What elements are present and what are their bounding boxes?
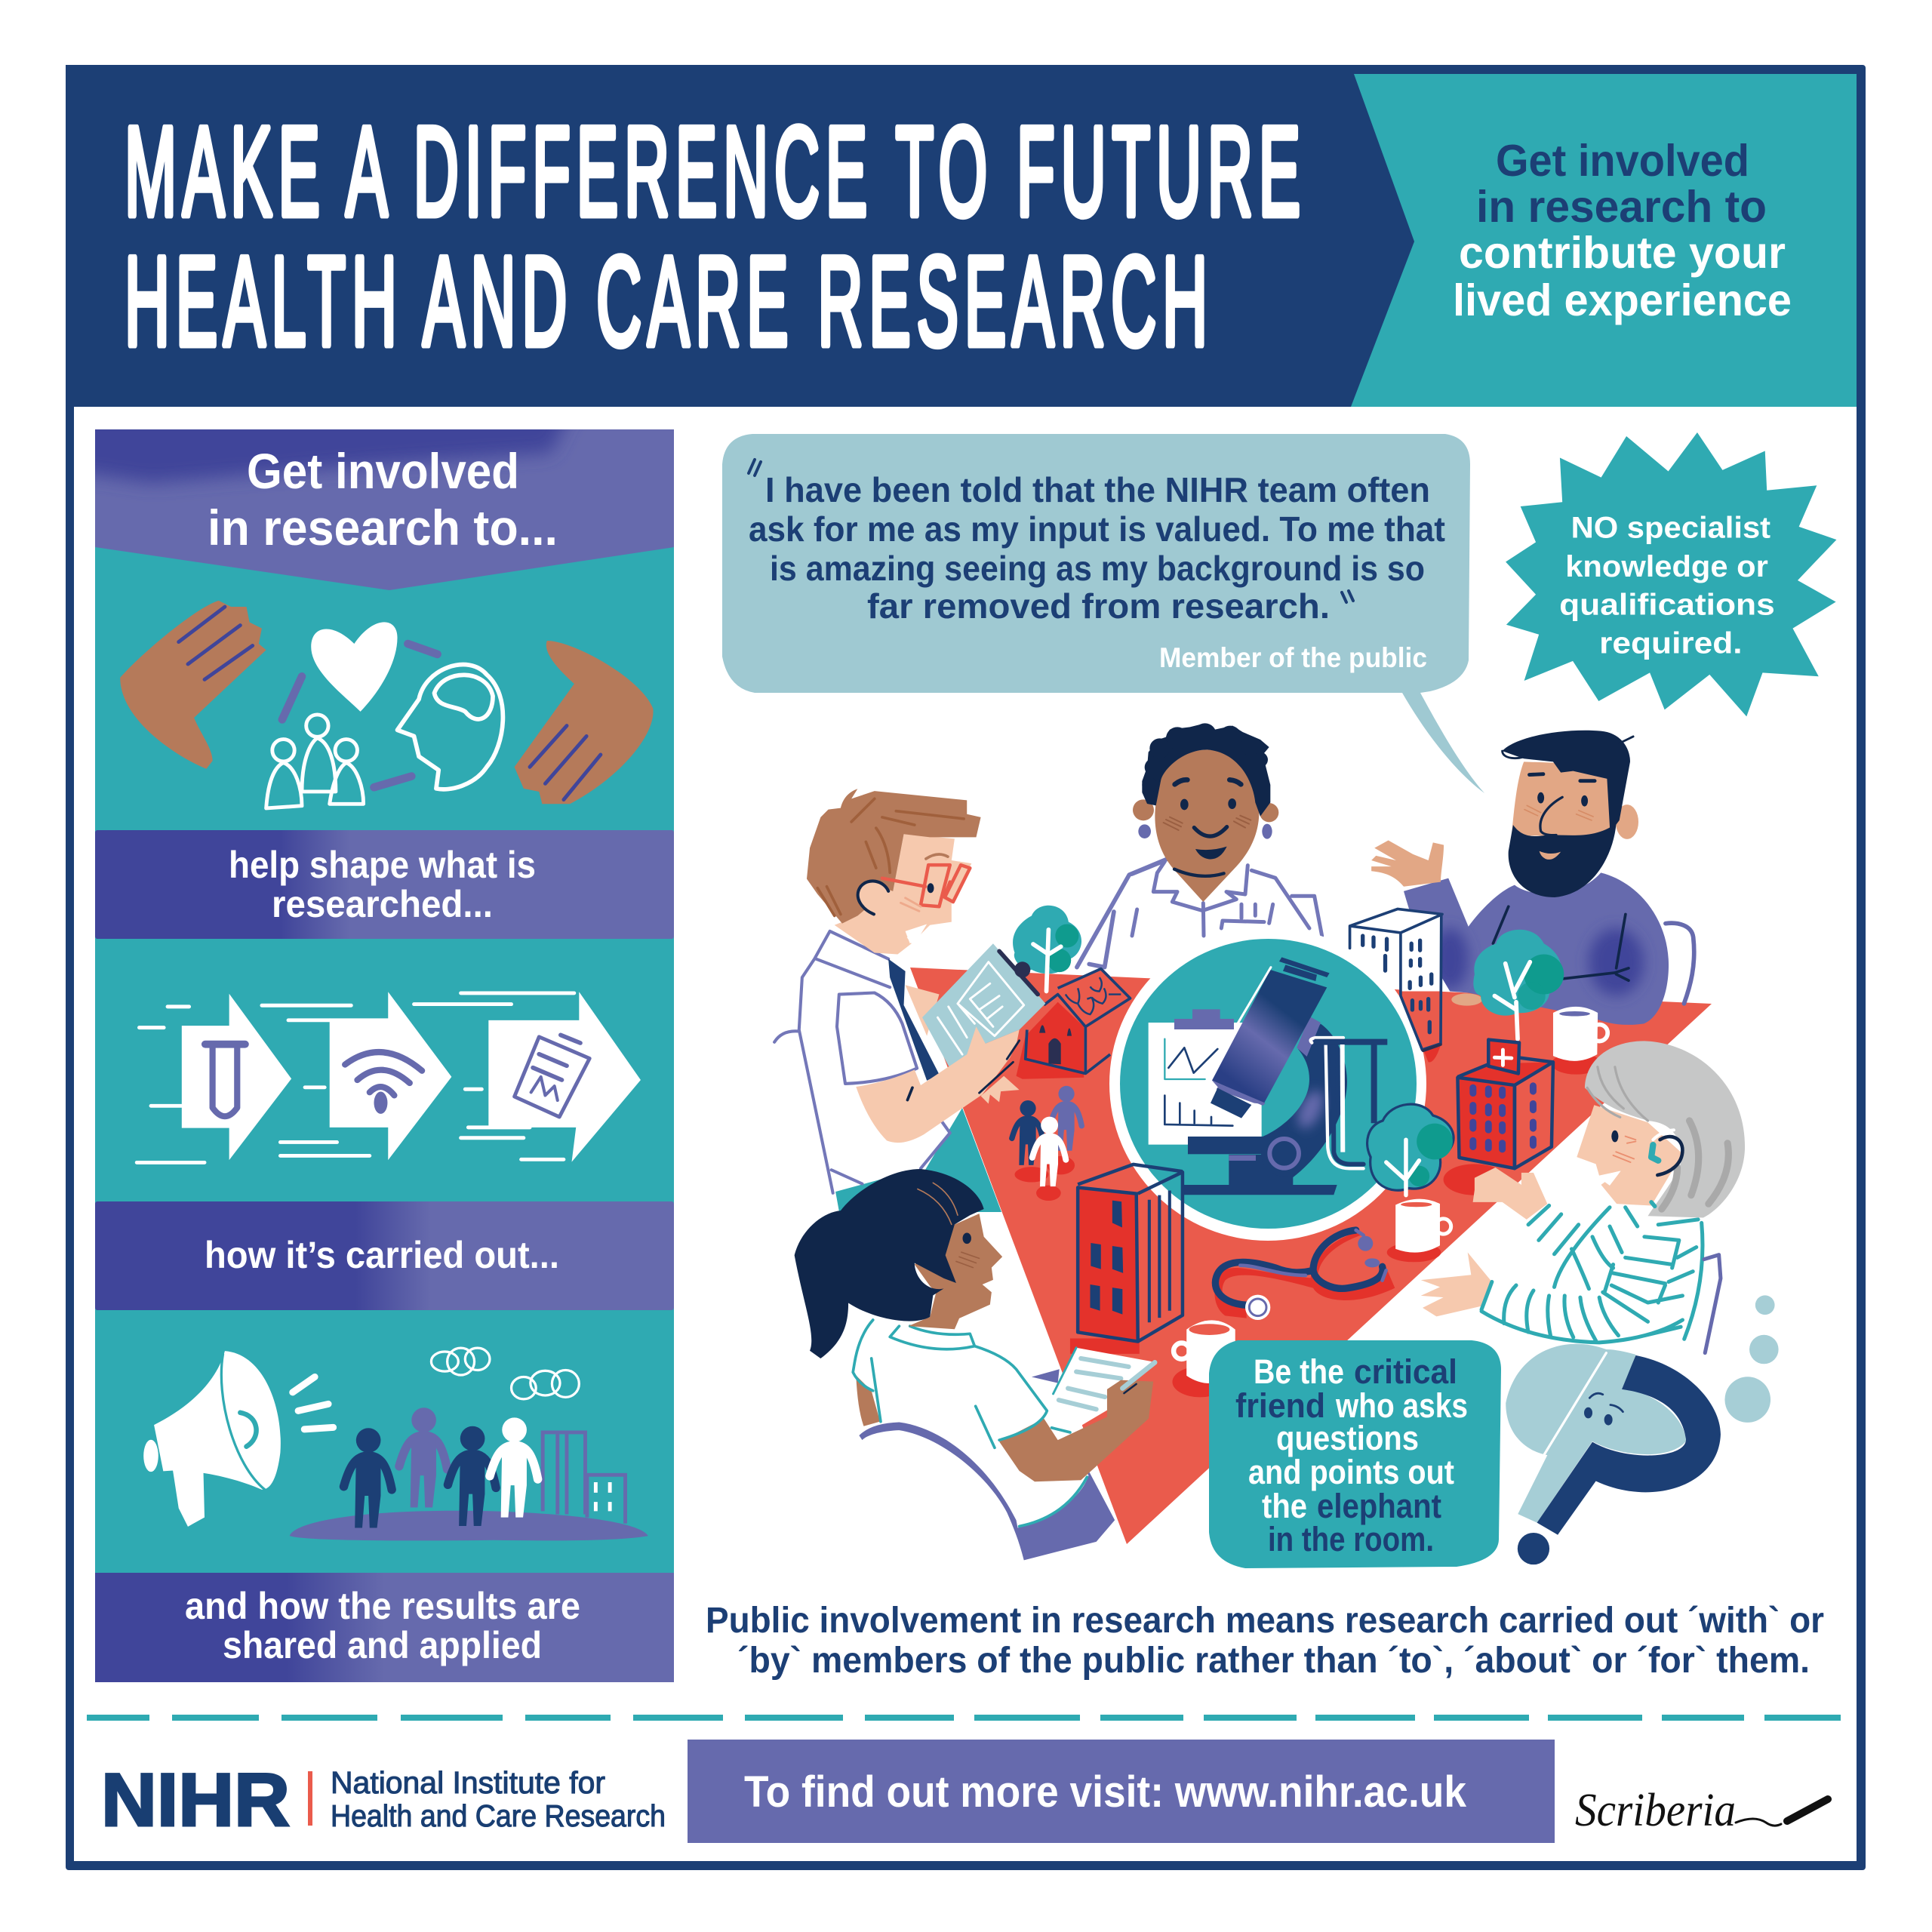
band: help shape: help shape what is	[229, 844, 536, 886]
icon: left hand	[120, 601, 266, 769]
quote text: is amazing seeing as my background is so	[770, 549, 1425, 588]
callout: critical friend: Be the	[1254, 1352, 1344, 1391]
band: how the results are shared: shared and applied	[223, 1624, 542, 1666]
callout: critical friend: the	[1262, 1487, 1307, 1525]
lab coat left shoulder and fill	[1077, 860, 1327, 974]
icon: connecting dashes	[282, 644, 438, 787]
microscope base	[1181, 1131, 1337, 1195]
teal floor wedge	[830, 1108, 1001, 1212]
woman's face	[1155, 749, 1259, 902]
band: help shape: researched...	[272, 883, 493, 925]
tree: top left	[1013, 906, 1081, 991]
band: how it's carried out: how it’s carried out...	[205, 1234, 559, 1276]
woman's features	[1164, 780, 1251, 876]
mug: top right	[1552, 1007, 1607, 1075]
band: help shape	[95, 830, 674, 939]
man's head	[835, 834, 971, 954]
figure: man with glasses and clipboard	[774, 789, 1045, 1193]
illustration: research meeting around a table	[774, 723, 1779, 1564]
header subtitle: Get involved	[1496, 136, 1749, 186]
callout: critical friend: elephant	[1317, 1487, 1441, 1525]
man's sleeve	[837, 993, 917, 1084]
icon: heart	[311, 622, 398, 712]
left column heading: Get involved	[247, 443, 519, 499]
microscope tube	[1211, 957, 1330, 1118]
microscope arm	[1262, 1017, 1347, 1177]
bearded man head	[1616, 804, 1638, 839]
header subtitle: in research to	[1476, 182, 1767, 232]
elephant face	[1584, 1393, 1623, 1426]
woman's curly hair	[1142, 723, 1270, 817]
icon: ground	[290, 1511, 648, 1540]
figure: bearded man	[1371, 731, 1694, 1025]
quote text: I have been told that the NIHR team often	[765, 470, 1430, 509]
older woman's head	[1577, 1105, 1682, 1205]
speed lines	[137, 993, 574, 1162]
quote speech bubble	[722, 434, 1484, 793]
question mark dark half	[1537, 1355, 1721, 1535]
quote marks	[749, 460, 1353, 602]
ponytail woman's body	[853, 1320, 1088, 1527]
tree: lower centre	[1367, 1104, 1454, 1195]
callout: critical friend: and points out	[1248, 1453, 1454, 1491]
thought bubbles	[1724, 1295, 1779, 1423]
table	[910, 968, 1712, 1544]
ponytail woman's arm	[999, 1380, 1153, 1481]
quote text: ask for me as my input is valued. To me that	[749, 509, 1445, 549]
man's tie	[888, 959, 939, 1081]
signature: Scriberia	[1575, 1785, 1828, 1836]
man's clipboard	[922, 943, 1045, 1072]
logo: NIHR: NIHR	[101, 1758, 290, 1841]
panel: left column get involved	[75, 408, 674, 1682]
header teal chevron panel	[1351, 74, 1857, 407]
left column heading: in research to...	[208, 500, 558, 555]
title	[125, 100, 1306, 372]
man's shirt	[801, 931, 950, 1192]
building: large red block	[1070, 1164, 1183, 1354]
building: tall block top right	[1350, 909, 1442, 1063]
older woman's stripes	[1481, 1205, 1703, 1343]
bearded man hand	[1371, 840, 1444, 887]
icon: elephant question mark	[1506, 1295, 1779, 1564]
band: how the results are shared	[95, 1573, 674, 1682]
older woman's chair	[1704, 1255, 1721, 1353]
icon: hands, heart, people and head	[120, 601, 654, 808]
house	[1017, 969, 1131, 1079]
ponytail woman's chair back	[1013, 1468, 1115, 1560]
central teal circle with microscope	[1109, 927, 1426, 1241]
older woman's sweater	[1481, 1205, 1705, 1344]
tree and mug lower centre	[1367, 1104, 1506, 1262]
tree: behind hospital	[1473, 930, 1564, 1039]
callout: critical friend: who asks	[1335, 1386, 1468, 1425]
figure: woman with ponytail writing	[795, 1169, 1155, 1560]
lab coat collar, pocket and chair	[1132, 861, 1322, 936]
header banner	[66, 65, 1857, 407]
icon: megaphone	[143, 1351, 334, 1527]
icon: community people	[343, 1407, 538, 1527]
bearded man sweater	[1404, 872, 1669, 1025]
woman's ears and earrings	[1133, 799, 1278, 839]
callout: starburst: knowledge or	[1565, 550, 1768, 583]
icon: process arrows	[137, 992, 641, 1162]
man's arm and hand	[856, 1026, 1020, 1143]
quote attribution: Member of the public	[1159, 642, 1427, 673]
arrow: wifi signal	[330, 992, 451, 1160]
callout: critical friend: in the room.	[1268, 1520, 1434, 1558]
band: how it's carried out	[95, 1201, 674, 1310]
callout: critical friend: friend	[1235, 1386, 1325, 1425]
man's far arm	[906, 985, 939, 1036]
quote text: far removed from research.	[867, 586, 1330, 626]
text: definition of public involvement: Public involvement in research means research carried out ´with` or	[706, 1601, 1824, 1641]
ponytail woman's notepad	[1047, 1348, 1152, 1438]
callout: starburst: required.	[1599, 626, 1743, 660]
small people on table	[1012, 1086, 1081, 1201]
callout: critical friend: questions	[1276, 1419, 1419, 1457]
chart clipboard	[1149, 1009, 1262, 1145]
footer call to action	[688, 1740, 1555, 1843]
figure: older woman with hearing aid	[1421, 1041, 1745, 1353]
callout: critical friend: critical	[1354, 1352, 1457, 1391]
header subtitle: lived experience	[1453, 275, 1792, 325]
arrow: test tube	[182, 994, 291, 1160]
older woman's hands	[1421, 1168, 1547, 1316]
ponytail woman's chair arm	[859, 1422, 1024, 1560]
figure: woman in lab coat, upper body	[1077, 723, 1327, 974]
callout: starburst: qualifications	[1559, 589, 1775, 622]
header subtitle: contribute your	[1459, 228, 1786, 278]
text: definition of public involvement: ´by` members of the public rather than ´to`, ´about` or ´for` them.	[737, 1641, 1810, 1681]
callout: starburst	[1506, 432, 1836, 716]
hospital shadow	[1444, 1164, 1506, 1195]
icon: three people outlines	[266, 715, 364, 808]
bearded man chair	[1666, 923, 1694, 1004]
ponytail woman's collar and trims	[853, 1320, 1087, 1526]
footer call to action: To find out more visit: www.nihr.ac.uk	[744, 1767, 1467, 1817]
building: hospital with cross	[1457, 1040, 1553, 1168]
left column heading	[95, 429, 674, 590]
question mark dot	[1518, 1533, 1549, 1564]
icon: megaphone and community	[143, 1348, 648, 1540]
text: definition of public involvement	[706, 1601, 1824, 1681]
icon: head with brain	[398, 665, 503, 789]
icon: buildings	[543, 1432, 626, 1524]
house, tree and small people on table	[1012, 906, 1131, 1201]
signature: Scriberia: Scriberia	[1575, 1785, 1736, 1836]
quote text	[749, 470, 1445, 626]
callout: critical friend	[1209, 1340, 1501, 1568]
left column teal background	[95, 547, 674, 1574]
header subtitle	[1453, 136, 1792, 325]
logo: NIHR	[101, 1758, 666, 1841]
question mark light half	[1506, 1344, 1686, 1523]
mug: bottom centre	[1172, 1320, 1235, 1397]
arrow: clipboard	[488, 992, 641, 1162]
icon: right hand	[515, 641, 654, 804]
mug: lower centre	[1387, 1199, 1451, 1262]
icon: clouds	[431, 1348, 579, 1399]
logo: NIHR: Health and Care Research	[331, 1798, 666, 1833]
ponytail woman's head	[909, 1214, 1002, 1329]
callout: starburst: NO specialist	[1571, 512, 1770, 545]
test tube	[1311, 1038, 1387, 1168]
logo: NIHR: National Institute for	[331, 1765, 605, 1800]
stethoscope	[1214, 1230, 1395, 1320]
band: how the results are shared: and how the results are	[185, 1585, 580, 1627]
